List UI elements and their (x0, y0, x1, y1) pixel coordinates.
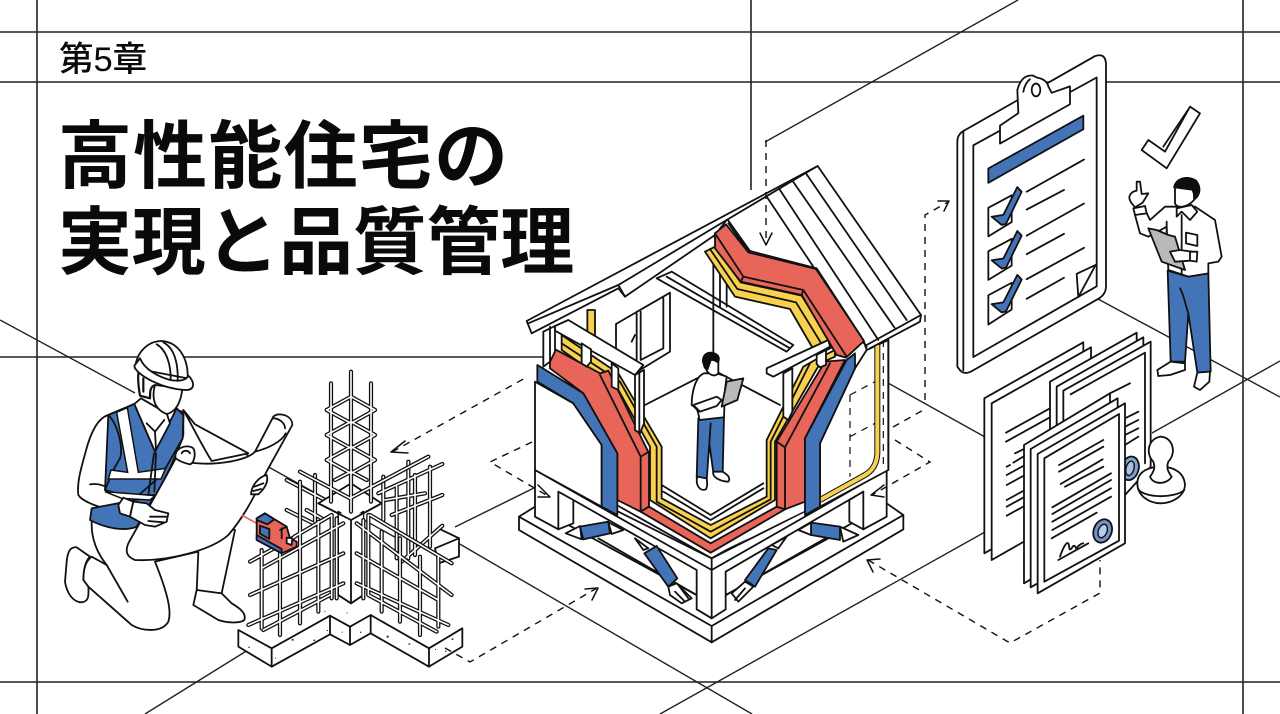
red insulation left (550, 348, 649, 512)
left roof eave (527, 166, 818, 333)
trousers (1168, 271, 1211, 373)
foundation slab (519, 503, 903, 642)
house cutaway (519, 166, 921, 642)
red insulation right (777, 360, 845, 509)
yellow insulation layer (562, 335, 835, 538)
collar (1177, 205, 1197, 220)
worker with blueprint (65, 341, 292, 630)
hand holding sheet (251, 475, 267, 494)
held clipboard (1148, 228, 1185, 270)
checklist rows (988, 160, 1084, 325)
hair (138, 373, 155, 398)
main title (58, 115, 574, 284)
front right beam and posts (767, 340, 830, 420)
back rebar mesh (287, 462, 442, 562)
interior room (550, 227, 863, 557)
right boot (193, 590, 245, 622)
legs (83, 502, 235, 630)
rebar foundation (238, 372, 462, 667)
column rebar cage (300, 372, 428, 512)
blue insulation left (537, 365, 617, 515)
face (154, 385, 182, 414)
certificate stack front (1024, 393, 1125, 593)
blueprint sheet (127, 414, 292, 560)
hydraulic jacks (566, 522, 858, 603)
front rebar mesh (248, 482, 452, 635)
back beam and window (616, 263, 793, 370)
floor outline (645, 370, 780, 520)
chapter label: 第5章 (59, 41, 147, 79)
front left beam and posts (543, 320, 644, 433)
neck and collar (134, 398, 170, 452)
shoes (1157, 362, 1185, 376)
checklist header bar (988, 116, 1083, 183)
red insulation floor (641, 507, 785, 553)
head (1175, 187, 1194, 207)
dashed process arrows (391, 140, 1100, 662)
far arm (183, 410, 248, 461)
blue insulation right (805, 353, 855, 515)
main title: 実現と品質管理 (58, 201, 574, 284)
left wall panel (535, 382, 602, 507)
roof yellow layer (705, 247, 833, 355)
clipboard (957, 55, 1106, 373)
sill band and piers (535, 470, 887, 618)
rubber stamp (1137, 437, 1185, 503)
central pier (318, 483, 382, 603)
floating checkmark (1142, 107, 1200, 168)
safety vest (90, 404, 183, 529)
main title: 高性能住宅の (58, 115, 509, 198)
right wall panel (820, 340, 888, 507)
torso and arm (78, 404, 183, 513)
hard hat (135, 341, 188, 378)
back left document stack (984, 342, 1091, 560)
inspector man (1129, 107, 1222, 390)
back right document stack (1050, 333, 1151, 495)
foundation (519, 470, 903, 642)
person with tablet (692, 352, 743, 490)
right support block (435, 538, 459, 563)
shirt (1135, 207, 1222, 277)
documents and stamp (984, 333, 1185, 593)
raised hand (1129, 182, 1148, 215)
yellow wiring in wall (587, 310, 888, 500)
laser level tool (242, 513, 297, 553)
roof red layer (715, 224, 864, 358)
roof panels (727, 166, 921, 350)
page fold (1077, 265, 1096, 297)
left boot (65, 547, 90, 602)
concrete footing (238, 532, 462, 667)
